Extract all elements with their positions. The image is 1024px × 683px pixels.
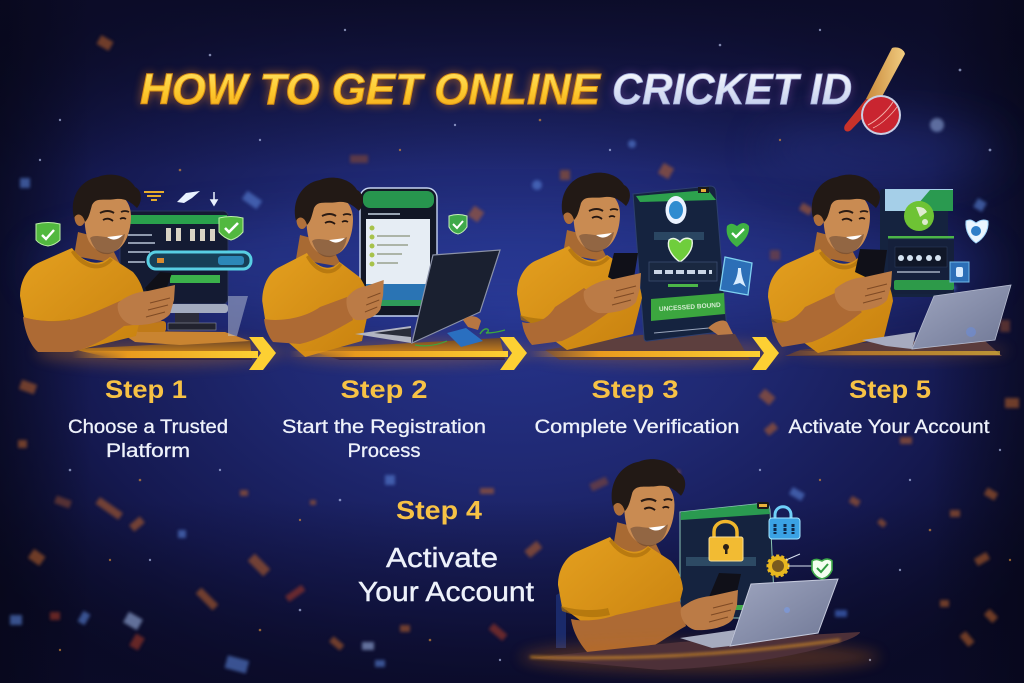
shield check	[449, 214, 467, 234]
man	[20, 175, 162, 352]
step 1 label	[68, 376, 228, 462]
step 4 label: Activate	[386, 542, 498, 573]
verification tablet	[633, 186, 727, 341]
fingers on tablet	[708, 321, 733, 335]
arrow 1	[72, 337, 276, 370]
title: CRICKET ID	[612, 65, 852, 114]
man	[768, 175, 893, 353]
gear and shield	[768, 554, 832, 579]
share badge	[720, 257, 752, 295]
phone	[709, 573, 741, 600]
search bar	[148, 252, 251, 269]
step 1 label: Choose a Trusted	[68, 417, 228, 438]
step 5 label: Step 5	[849, 376, 931, 404]
man	[517, 173, 642, 350]
hand	[681, 590, 738, 630]
title: HOW TO GET ONLINE	[140, 65, 602, 114]
verification tablet: UNCESSED BOUND	[659, 302, 721, 313]
table 3	[530, 334, 790, 365]
step 4 illustration	[520, 459, 880, 673]
shield checks	[36, 216, 243, 246]
step 2 illustration	[262, 178, 505, 357]
table 5	[785, 341, 1010, 360]
hand	[584, 273, 641, 313]
step 3 label	[534, 376, 740, 438]
step 1 label: Platform	[106, 441, 190, 462]
cards and cables	[415, 328, 505, 347]
step 2 label	[282, 376, 486, 462]
arrow 3	[530, 337, 779, 370]
step 2 label: Step 2	[340, 376, 428, 404]
laptop	[355, 250, 500, 343]
browser panel	[680, 502, 775, 618]
hand	[118, 285, 175, 325]
step 3 label: Step 3	[592, 376, 678, 404]
icon: cricket bat and ball	[844, 47, 905, 135]
floating icons	[144, 191, 217, 205]
padlock gold	[709, 522, 743, 561]
man	[262, 178, 370, 357]
heart check	[727, 223, 749, 247]
title: CRICKET ID	[612, 65, 852, 114]
man	[558, 459, 686, 655]
desk board	[118, 296, 250, 345]
shield icon	[966, 220, 988, 243]
table 1	[35, 338, 285, 366]
step 2 label: Start the Registration	[282, 417, 486, 438]
padlock blue	[769, 507, 800, 539]
title	[140, 65, 852, 114]
step 5 label: Activate Your Account	[788, 417, 990, 438]
laptop	[680, 579, 838, 648]
step 1 illustration	[20, 175, 251, 352]
arrow 2	[290, 337, 527, 370]
step 4 label: Your Account	[358, 576, 534, 607]
phone	[855, 249, 887, 285]
web panel	[880, 189, 954, 297]
step 3 illustration	[517, 173, 752, 350]
hand	[346, 280, 384, 320]
step 2 label: Process	[348, 441, 420, 462]
phone	[145, 272, 172, 297]
hand	[835, 271, 892, 311]
monitor	[120, 211, 228, 330]
step 4 label: Step 4	[396, 495, 483, 525]
step 3 label: Complete Verification	[534, 417, 740, 438]
phone	[608, 253, 638, 290]
phone screen	[360, 188, 437, 316]
title: HOW TO GET ONLINE	[140, 65, 602, 114]
step 4 label	[358, 495, 534, 607]
step 1 label: Step 1	[105, 376, 187, 404]
table 2	[285, 338, 535, 365]
table 4	[520, 632, 880, 673]
square badge	[950, 262, 969, 282]
step 5 label	[788, 376, 990, 438]
chair	[556, 590, 566, 648]
laptop	[862, 285, 1011, 349]
step 5 illustration	[768, 175, 1011, 353]
